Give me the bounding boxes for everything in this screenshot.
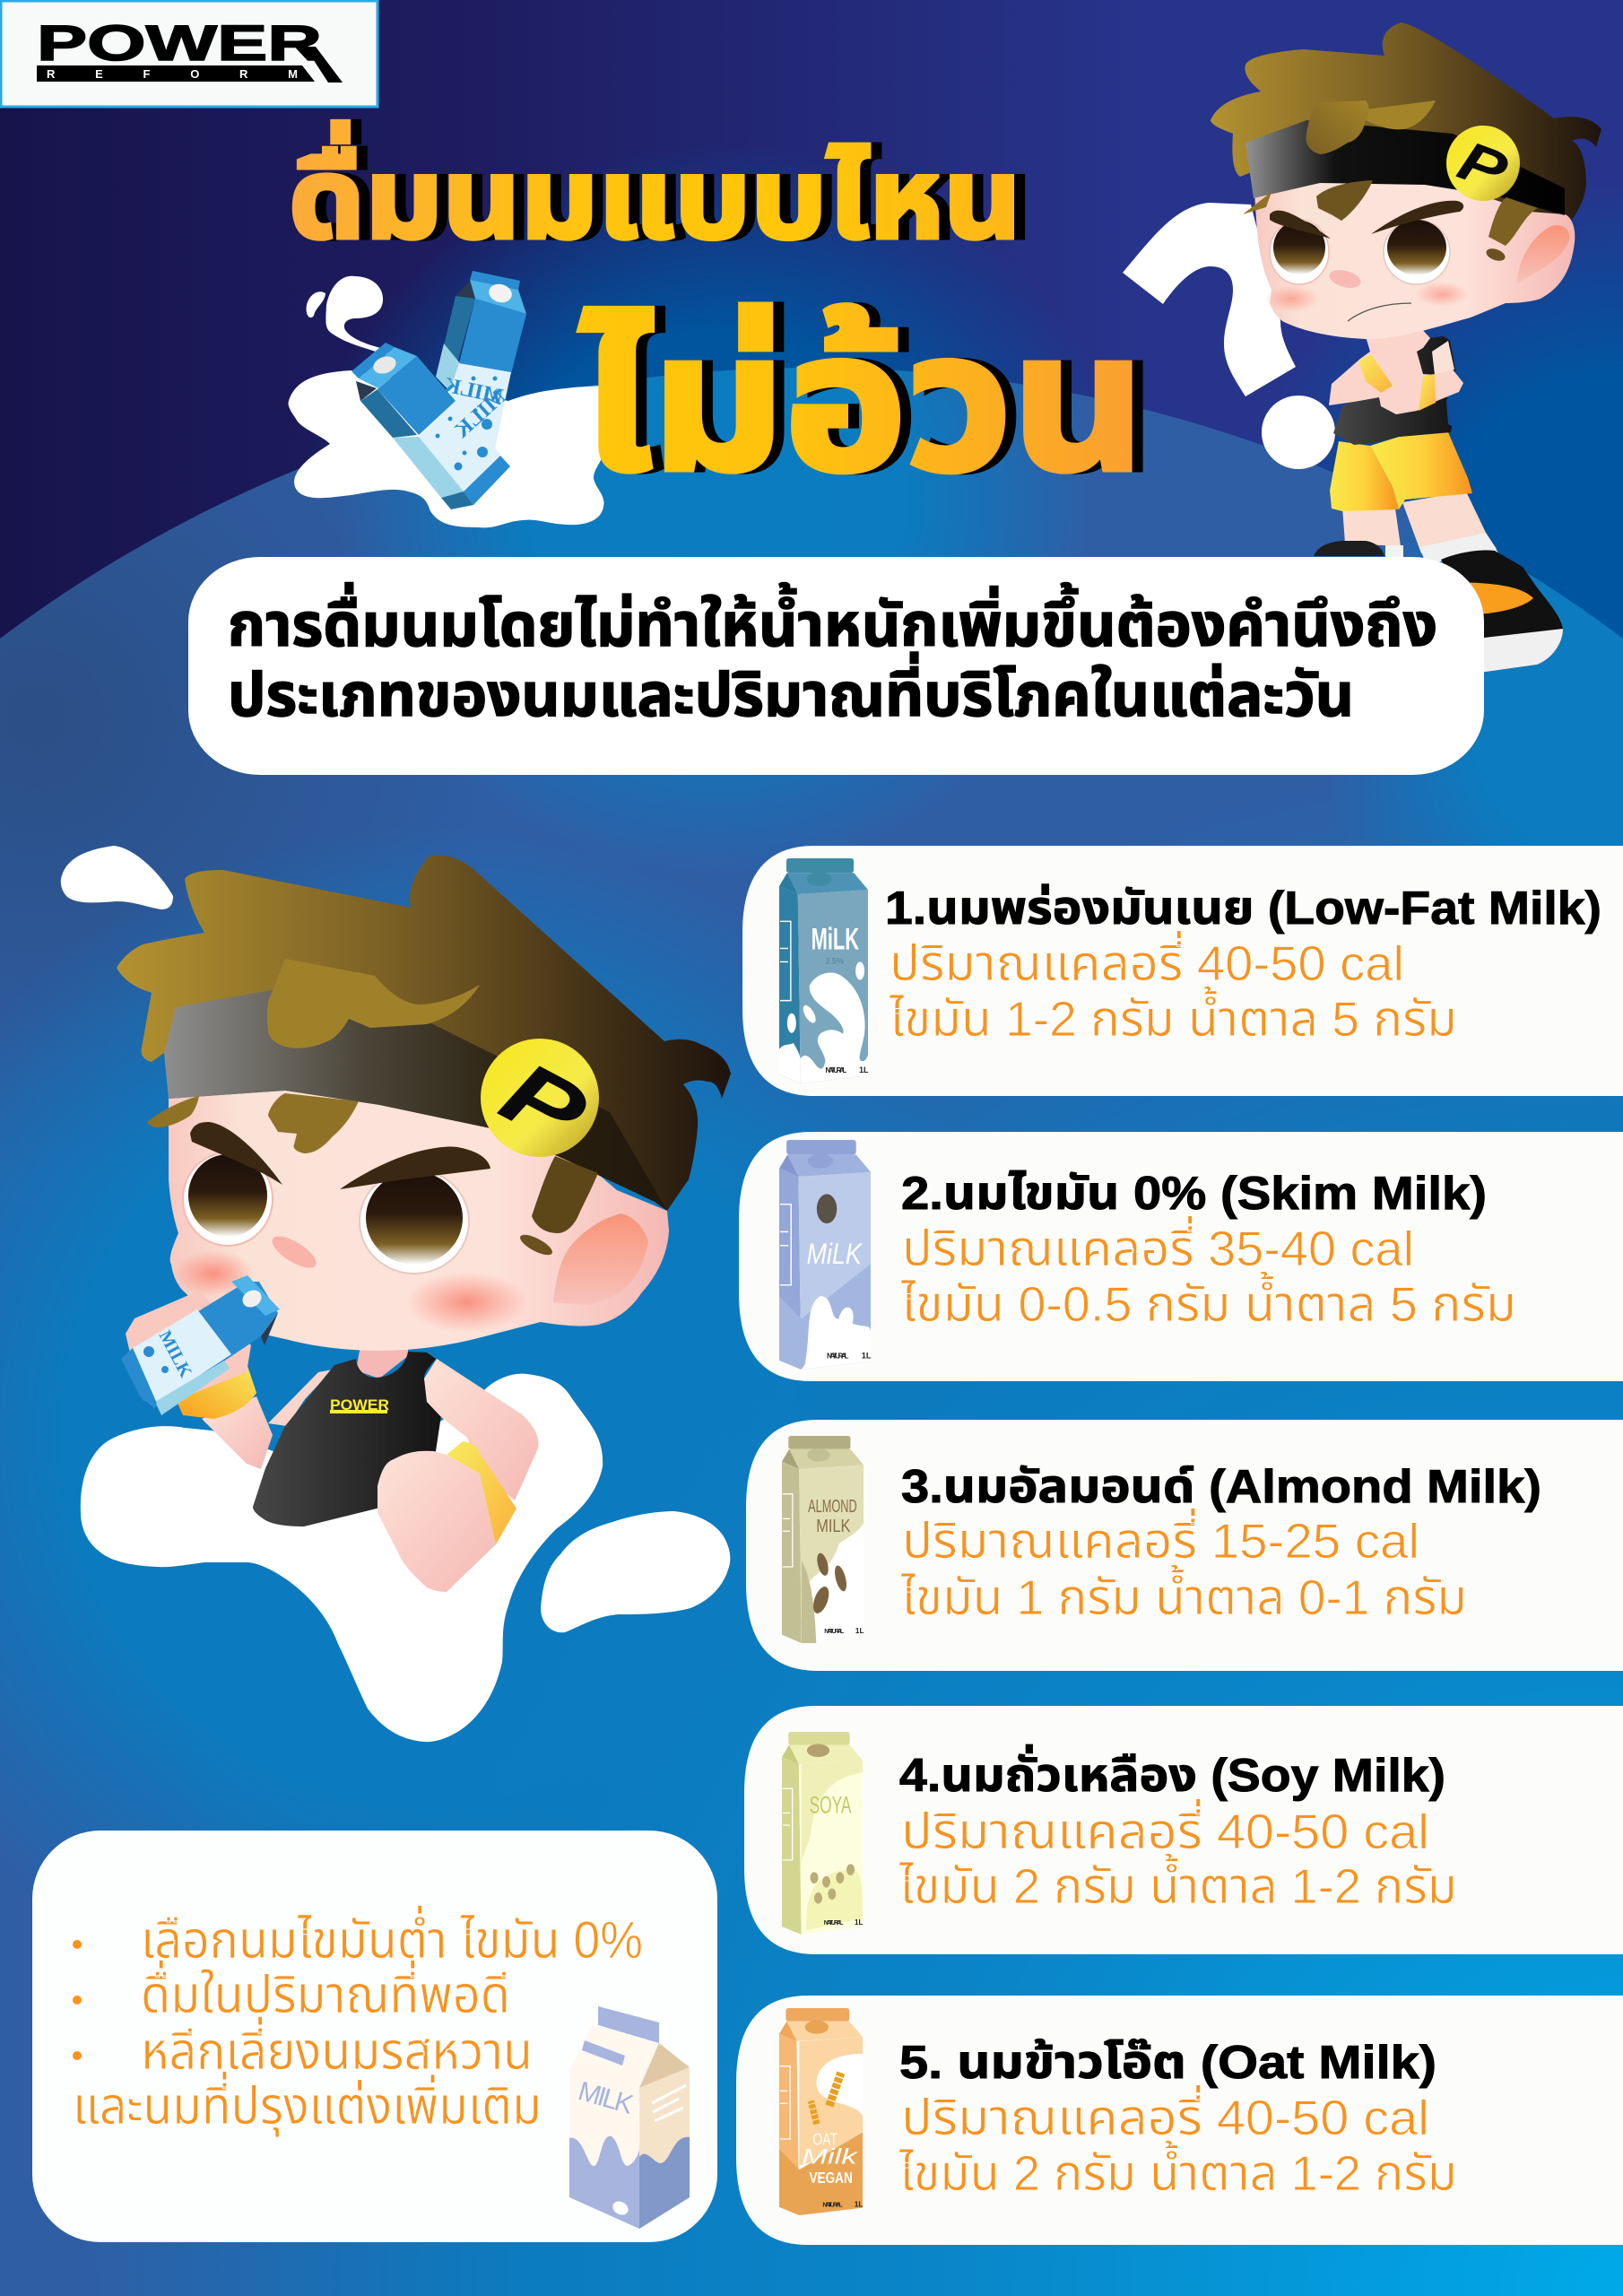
icon: milk carton: MILK [575, 2076, 637, 2120]
icon: oat milk carton: VEGAN [809, 2169, 853, 2187]
illustration: spilled milk cartons [288, 271, 603, 527]
icon: almond milk carton: ALMOND [808, 1497, 857, 1517]
character: mascot drinking milk [117, 855, 731, 1592]
fat and sugar: ไขมัน 2 กรัม น้ำตาล 1-2 กรัม [898, 2140, 1457, 2201]
icon: leaning carton: MILK [450, 386, 510, 443]
icon: oat milk carton [779, 2008, 863, 2215]
carton held in hand: MILK [155, 1327, 195, 1381]
forelock [1306, 100, 1436, 154]
icon: skim milk carton: NATURAL [827, 1352, 849, 1361]
nose and cheeks [172, 1231, 528, 1333]
logo: Power Reform [1, 1, 378, 107]
upper arm back [268, 1370, 333, 1426]
heading: 4.นมถั่วเหลือง (Soy Milk) [899, 1744, 1445, 1802]
logo: Power Reform: POWER [37, 14, 322, 71]
hair back [117, 855, 731, 1211]
heading: 1.นมพร่องมันเนย (Low-Fat Milk) [885, 883, 1601, 935]
shorts [1330, 432, 1472, 511]
calories: ปริมาณแคลอรี่ 35-40 cal [902, 1215, 1414, 1276]
icon: skim milk carton: MiLK [807, 1237, 863, 1270]
nose, cheeks, mouth [1265, 267, 1469, 321]
badge: P [486, 1040, 603, 1166]
icon: soy milk carton: 1L [855, 1918, 863, 1926]
headband [164, 990, 667, 1211]
front hair [1243, 180, 1538, 263]
title line 1: ดื่มนมแบบไหน [299, 121, 1032, 262]
shirt [253, 1352, 441, 1526]
panel: 2 skim milk [739, 1132, 1623, 1381]
milk splash behind big mascot [61, 846, 730, 1742]
icon: almond milk carton [782, 1436, 864, 1643]
icon: oat milk carton: OAT [812, 2130, 838, 2148]
title line 2: ไม่อ้วน [591, 294, 1156, 510]
headband [1245, 120, 1565, 215]
panel: 4 soy milk [744, 1706, 1623, 1954]
icon: soy milk carton: NATURAL [824, 1918, 844, 1926]
hand [126, 1291, 251, 1399]
calories: ปริมาณแคลอรี่ 40-50 cal [890, 930, 1404, 991]
panel: tips: หลีกเลี่ยงนมรสหวาน [141, 2016, 533, 2081]
panel: intro statement: ประเภทของนมและปริมาณที่บริโภคในแต่ละวัน [228, 652, 1354, 729]
icon: oat milk carton: NATURAL [822, 2201, 843, 2209]
icon: upright carton [436, 271, 526, 448]
icon: low-fat milk carton: NATURAL [825, 1066, 846, 1074]
ear [553, 1213, 648, 1305]
icon: question mark [1123, 203, 1335, 469]
panel: tips [32, 1831, 717, 2242]
headband badge: P [1450, 128, 1515, 203]
heading: 2.นมไขมัน 0% (Skim Milk) [901, 1168, 1487, 1220]
icon: almond milk carton: NATURAL [824, 1627, 845, 1635]
panel: 5 oat milk [736, 1996, 1623, 2245]
icon: low-fat milk carton [779, 858, 869, 1083]
icon: upright carton: MILK [441, 374, 505, 409]
calories: ปริมาณแคลอรี่ 15-25 cal [902, 1508, 1419, 1569]
heading: 3.นมอัลมอนด์ (Almond Milk) [901, 1461, 1541, 1513]
calories: ปริมาณแคลอรี่ 40-50 cal [901, 2084, 1429, 2145]
forelock [267, 959, 480, 1048]
panel: tips: และนมที่ปรุงแต่งเพิ่มเติม [73, 2071, 542, 2137]
fat and sugar: ไขมัน 2 กรัม น้ำตาล 1-2 กรัม [898, 1853, 1457, 1914]
wrist band right [447, 1441, 516, 1544]
icon: milk carton [569, 2006, 690, 2229]
eyes [1270, 220, 1450, 284]
icon: almond milk carton: 1L [855, 1627, 864, 1635]
panel: 1 low-fat milk [742, 846, 1623, 1096]
neck [356, 1345, 408, 1378]
right arm [424, 1359, 538, 1500]
front hair [147, 1093, 598, 1259]
shirt [1333, 336, 1455, 445]
calories: ปริมาณแคลอรี่ 40-50 cal [901, 1798, 1429, 1859]
panel: tips: เลือกนมไขมันต่ำ ไขมัน 0% [141, 1905, 643, 1970]
icon: low-fat milk carton: MiLK [812, 922, 859, 956]
title line 1: ดื่มนมแบบไหน [289, 121, 1021, 262]
icon: skim milk carton: 1L [862, 1352, 872, 1361]
forearm [202, 1396, 273, 1469]
fat and sugar: ไขมัน 0-0.5 กรัม น้ำตาล 5 กรัม [900, 1271, 1516, 1332]
forearm with fist [378, 1451, 496, 1592]
eyes [183, 1152, 469, 1274]
panel: 3 almond milk [746, 1420, 1623, 1671]
fat and sugar: ไขมัน 1 กรัม น้ำตาล 0-1 กรัม [900, 1564, 1467, 1625]
icon: low-fat milk carton: 1L [859, 1065, 869, 1074]
face [169, 1085, 669, 1351]
icon: soy milk carton [782, 1732, 863, 1935]
icon: soy milk carton: SOYA [810, 1791, 851, 1818]
arms [1329, 326, 1463, 414]
icon: low-fat milk carton: 2.5% [825, 956, 844, 965]
hair back [1211, 22, 1601, 233]
legs [1314, 491, 1499, 563]
character: thinking mascot [1211, 22, 1601, 673]
panel: intro statement: การดื่มนมโดยไม่ทำให้น้ำหนักเพิ่มขึ้นต้องคำนึงถึง [228, 582, 1437, 659]
icon: oat milk carton: Milk [802, 2145, 859, 2170]
title line 2: ไม่อ้วน [580, 294, 1145, 510]
brows [190, 1122, 490, 1189]
logo: Power Reform: R E F O R M [47, 67, 298, 81]
icon: skim milk carton [779, 1140, 872, 1370]
face [1254, 179, 1575, 339]
fat and sugar: ไขมัน 1-2 กรัม น้ำตาล 5 กรัม [889, 986, 1457, 1047]
heading: 5. นมข้าวโอ๊ต (Oat Milk) [899, 2037, 1436, 2089]
wrist band left [176, 1363, 256, 1419]
panel: intro statement [188, 557, 1484, 775]
icon: leaning carton [352, 343, 510, 509]
shirt logo: POWER [330, 1396, 389, 1413]
right shoe [1441, 550, 1563, 673]
carton held in hand [121, 1275, 280, 1415]
icon: oat milk carton: 1L [855, 2200, 863, 2209]
icon: almond milk carton: MILK [816, 1517, 851, 1536]
brows [1270, 201, 1463, 239]
ear [1517, 225, 1569, 283]
panel: tips: ดื่มในปริมาณที่พอดี [141, 1960, 510, 2024]
